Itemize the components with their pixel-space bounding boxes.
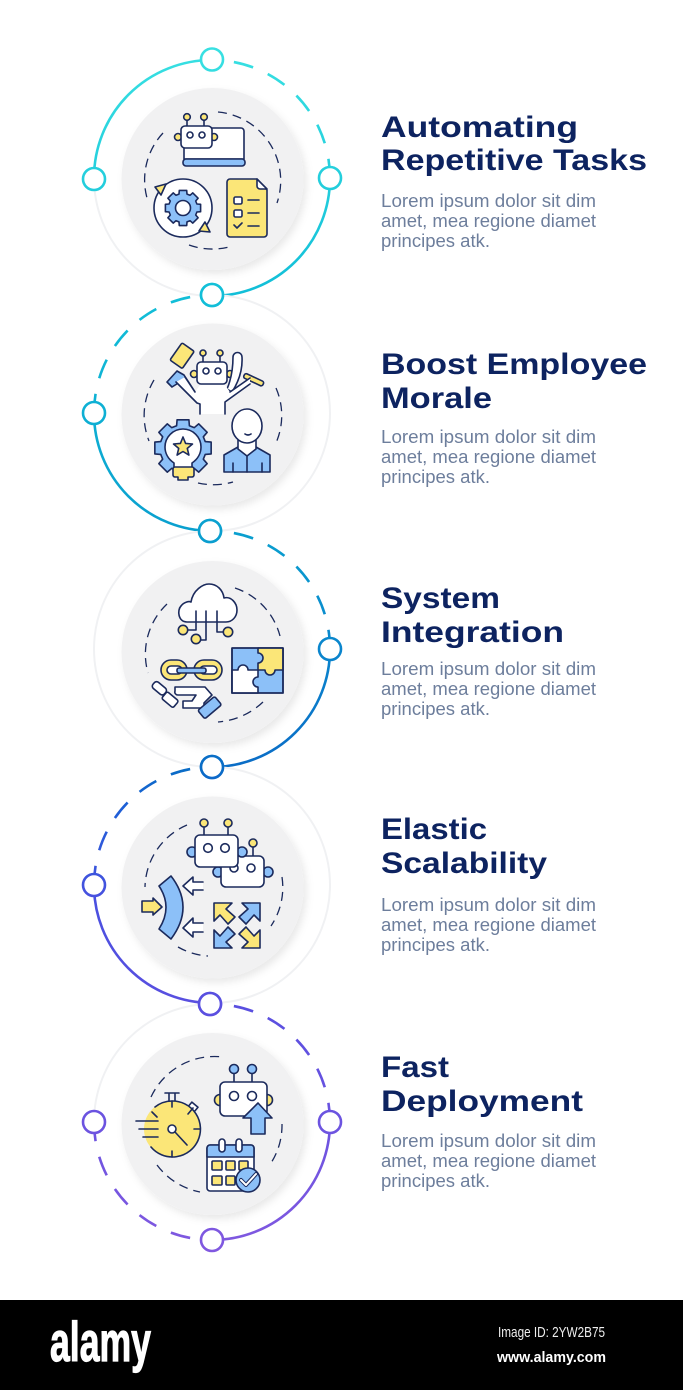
heading 3	[381, 582, 564, 649]
text block 2: principes atk.	[381, 467, 490, 487]
text block 4: Lorem ipsum dolor sit dim	[381, 895, 596, 915]
icon: four scaling arrows	[214, 903, 260, 948]
dashed orbit 4	[145, 825, 283, 956]
icon: cloud network	[178, 584, 237, 644]
icon: elastic barrier with arrows	[142, 876, 203, 939]
panel: fast deployment	[83, 993, 596, 1251]
text block 5: amet, mea regione diamet	[381, 1151, 596, 1171]
text block 2: Lorem ipsum dolor sit dim	[381, 427, 596, 447]
text block 1: Lorem ipsum dolor sit dim	[381, 191, 596, 211]
text block 1: principes atk.	[381, 231, 490, 251]
footer bar	[0, 1300, 683, 1390]
heading 1: Repetitive Tasks	[381, 144, 647, 177]
website: www.alamy.com	[496, 1349, 606, 1366]
text block 1	[381, 191, 596, 251]
heading 5	[381, 1051, 583, 1118]
icon: multitasking robot	[167, 343, 264, 414]
heading 2: Morale	[381, 382, 492, 415]
text block 3: Lorem ipsum dolor sit dim	[381, 659, 596, 679]
text block 3: amet, mea regione diamet	[381, 679, 596, 699]
heading 1	[381, 111, 647, 177]
text block 5: Lorem ipsum dolor sit dim	[381, 1131, 596, 1151]
dashed orbit 2	[144, 380, 282, 485]
heading 3: Integration	[381, 616, 564, 649]
inner disc 2	[122, 324, 304, 506]
text block 4: amet, mea regione diamet	[381, 915, 596, 935]
ring 3	[94, 520, 341, 778]
text block 5: principes atk.	[381, 1171, 490, 1191]
heading 4: Elastic	[381, 813, 487, 846]
heading 3: System	[381, 582, 500, 615]
icon: two robots	[187, 819, 273, 887]
dashed orbit 1	[145, 112, 281, 249]
heading 1: Automating	[381, 111, 578, 144]
text block 5	[381, 1131, 596, 1191]
icon: calendar with check	[207, 1139, 260, 1192]
heading 5: Deployment	[381, 1085, 583, 1118]
icon: stopwatch	[136, 1093, 200, 1157]
dashed orbit 5	[151, 1056, 282, 1192]
text block 4: principes atk.	[381, 935, 490, 955]
inner disc 5	[122, 1033, 304, 1215]
heading 4	[381, 813, 547, 880]
ring 4	[83, 756, 330, 1015]
panel: automating repetitive tasks	[83, 48, 647, 306]
ring 2	[83, 284, 330, 542]
heading 2	[381, 348, 647, 415]
inner disc 4	[122, 796, 304, 978]
panel: system integration	[94, 520, 596, 778]
heading 5: Fast	[381, 1051, 449, 1084]
dashed orbit 3	[145, 588, 280, 722]
ring 5	[83, 993, 341, 1251]
text block 3	[381, 659, 596, 719]
icon: gear with light bulb and star	[155, 420, 211, 480]
heading 2: Boost Employee	[381, 348, 647, 381]
text block 3: principes atk.	[381, 699, 490, 719]
text block 2	[381, 427, 596, 487]
panel: boost employee morale	[83, 284, 647, 542]
ring 1	[83, 48, 341, 306]
inner disc 1	[122, 88, 304, 270]
icon: puzzle	[232, 648, 283, 693]
text block 4	[381, 895, 596, 955]
logo: alamy: alamy	[50, 1310, 151, 1373]
icon: gear with cycle arrows	[154, 179, 212, 237]
heading 4: Scalability	[381, 847, 547, 880]
text block 2: amet, mea regione diamet	[381, 447, 596, 467]
icon: robot on laptop	[174, 114, 245, 166]
panel: elastic scalability	[83, 756, 596, 1015]
image id: Image ID: 2YW2B75	[498, 1325, 605, 1341]
inner disc 3	[122, 561, 304, 743]
icon: robot with up arrow	[214, 1064, 272, 1134]
icon: employee	[224, 409, 270, 472]
icon: chain link	[161, 660, 222, 680]
icon: checklist document	[227, 179, 267, 237]
icon: robotic hand	[151, 680, 222, 719]
text block 1: amet, mea regione diamet	[381, 211, 596, 231]
